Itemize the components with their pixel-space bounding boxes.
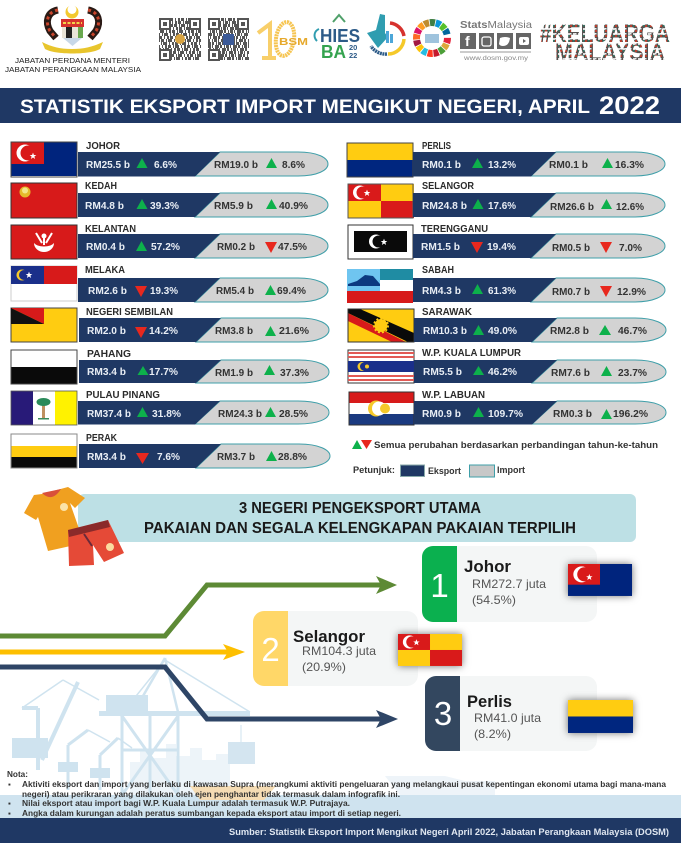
bar: export and import: RM3.7 b	[217, 451, 255, 463]
bar: export and import: RM2.6 b	[88, 285, 127, 297]
background: port illustration	[0, 658, 681, 818]
bar: export and import	[78, 278, 328, 302]
bar: export and import: RM0.7 b	[552, 286, 590, 298]
flag: Pulau Pinang	[11, 391, 77, 425]
flag: Selangor large	[398, 634, 462, 666]
bar: export and import	[79, 360, 329, 383]
bar: export and import: 69.4%	[277, 285, 307, 297]
bar: export and import	[78, 401, 329, 424]
card: rank 2 Selangor: Selangor	[293, 628, 366, 646]
logo: StatsMalaysia social: www.dosm.gov.my	[463, 55, 529, 62]
flag: Johor large	[568, 564, 632, 596]
state name: PERAK	[86, 432, 117, 444]
flag: Sarawak	[348, 309, 414, 342]
state name: W.P. KUALA LUMPUR	[422, 347, 521, 359]
notes: Nilai eksport atau import bagi W.P. Kuala Lumpur adalah termasuk W.P. Putrajaya.	[22, 799, 350, 808]
flag: Negeri Sembilan	[11, 308, 77, 342]
legend: Eksport	[428, 466, 461, 476]
logo: StatsMalaysia social: StatsMalaysia	[460, 19, 532, 31]
bar: export and import: RM0.3 b	[553, 408, 592, 420]
title banner	[0, 88, 681, 123]
flag: W.P. Labuan	[349, 392, 414, 425]
row: Sabah	[347, 264, 665, 303]
state name: KEDAH	[85, 180, 117, 192]
bar: export and import: RM24.3 b	[218, 408, 262, 420]
bar: export and import: 13.2%	[488, 159, 517, 171]
logo: Keluarga Malaysia: MALAYSIA	[555, 39, 665, 66]
notes	[7, 770, 667, 818]
logo: SDG wheel	[416, 22, 448, 54]
card: rank 1 Johor	[422, 546, 597, 622]
bar: export and import: RM0.9 b	[422, 408, 461, 420]
bar: export and import: 40.9%	[279, 200, 309, 212]
bar: export and import: RM4.3 b	[422, 285, 461, 297]
row: Johor	[11, 140, 328, 177]
bar: export and import: 21.6%	[279, 325, 310, 337]
bar: export and import	[79, 444, 330, 468]
row: Perlis	[347, 140, 665, 177]
row: Kedah	[11, 180, 328, 218]
bar: export and import: 12.9%	[617, 286, 647, 298]
bar: export and import: RM0.5 b	[552, 242, 590, 254]
flag: Kedah	[11, 183, 77, 218]
row: Perak	[11, 432, 330, 468]
bar: export and import: RM19.0 b	[214, 159, 258, 171]
bar: export and import: 23.7%	[618, 367, 648, 379]
notes: Nota:	[7, 770, 28, 779]
bar: export and import: 19.4%	[487, 241, 517, 253]
bar: export and import: 12.6%	[616, 201, 645, 213]
flag: Perlis	[347, 143, 413, 177]
state name: PERLIS	[422, 140, 451, 152]
card: rank 3 Perlis: RM41.0 juta	[474, 711, 541, 725]
arrow: navy to Perlis	[0, 667, 398, 728]
row: Sarawak	[348, 306, 666, 342]
bar: export and import: RM0.1 b	[422, 159, 461, 171]
logo: hand sign	[367, 14, 404, 54]
card: rank 2 Selangor: RM104.3 juta	[302, 644, 376, 658]
bar: export and import	[413, 193, 665, 217]
bar: export and import	[78, 152, 328, 176]
bar: export and import	[413, 234, 665, 258]
state name: SABAH	[422, 264, 454, 276]
card: rank 3 Perlis	[425, 676, 597, 751]
bar: export and import: 19.3%	[150, 285, 179, 297]
notes: negeri) atau perikraran yang dilakukan oleh ejen penghantar tidak termasuk dalam infografik ini.	[22, 790, 400, 799]
flag: W.P. Kuala Lumpur	[348, 350, 414, 383]
bar: export and import: 196.2%	[613, 408, 649, 420]
state name: NEGERI SEMBILAN	[86, 306, 173, 318]
logo: StatsMalaysia social: f	[465, 33, 470, 49]
card: rank 2 Selangor: (20.9%)	[302, 660, 346, 674]
bar: export and import: RM10.3 b	[423, 325, 467, 337]
notes: Aktiviti eksport dan import yang berlaku di kawasan Supra (merangkumi aktiviti pengeluaran yang melangkaui pusat kepentingan ekonomi utama bagi mana-mana	[22, 780, 667, 789]
state name: MELAKA	[85, 264, 125, 276]
card: rank 2 Selangor	[253, 611, 418, 686]
bar: export and import: RM4.8 b	[85, 200, 124, 212]
flag: Terengganu	[348, 225, 413, 259]
heading banner: top 3 exporting states: PAKAIAN DAN SEGALA KELENGKAPAN PAKAIAN TERPILIH	[144, 520, 576, 537]
notes: ▪	[8, 809, 11, 818]
bar: export and import: RM0.1 b	[549, 159, 588, 171]
bar: export and import: RM3.4 b	[87, 451, 126, 463]
row: Terengganu	[348, 223, 665, 259]
bar: export and import: 31.8%	[152, 408, 182, 420]
footer: source: Sumber: Statistik Eksport Import Mengikut Negeri April 2022, Jabatan Perangkaan Malaysia (DOSM)	[229, 827, 669, 838]
logo: HIES BA 2022	[315, 15, 360, 62]
agency name: JABATAN PERDANA MENTERI	[15, 56, 130, 65]
state name: PULAU PINANG	[86, 389, 160, 401]
flag: Melaka	[11, 266, 77, 301]
flag: Pahang	[11, 350, 77, 384]
bar: export and import: 17.6%	[488, 200, 517, 212]
bar: export and import: RM5.5 b	[423, 366, 462, 378]
bar: export and import: 28.5%	[279, 408, 309, 420]
bar: export and import: RM3.8 b	[215, 325, 253, 337]
bar: export and import	[413, 278, 665, 302]
row: W.P. Labuan	[349, 389, 666, 425]
bar: export and import: 49.0%	[488, 325, 518, 337]
state name: JOHOR	[86, 140, 120, 152]
row: Pahang	[11, 348, 329, 384]
bar: export and import: 14.2%	[149, 325, 179, 337]
bar: export and import: RM1.9 b	[215, 367, 253, 379]
row: Selangor	[348, 180, 665, 218]
bar: export and import: 37.3%	[280, 367, 310, 379]
bar: export and import: 7.6%	[157, 451, 181, 463]
bar: export and import: 46.7%	[618, 325, 648, 337]
bar: export and import	[413, 152, 665, 176]
bar: export and import: 109.7%	[488, 408, 524, 420]
bar: export and import	[414, 401, 666, 424]
bar: export and import: RM26.6 b	[550, 201, 594, 213]
card: rank 3 Perlis: Perlis	[467, 693, 512, 711]
bar: export and import	[78, 234, 328, 258]
arrow: green to Johor	[0, 576, 397, 636]
flag: Johor	[11, 142, 77, 177]
card: rank 1 Johor: 1	[430, 567, 449, 604]
bar: export and import: 8.6%	[282, 159, 306, 171]
legend: Petunjuk:	[353, 465, 395, 475]
row: W.P. Kuala Lumpur	[348, 347, 666, 383]
note: year-on-year change: Semua perubahan berdasarkan perbandingan tahun-ke-tahun	[374, 440, 658, 451]
footer: source	[0, 818, 681, 843]
logo: StatsMalaysia social	[460, 19, 532, 62]
state name: KELANTAN	[85, 223, 136, 235]
flag: Perlis large	[568, 700, 633, 733]
bar: export and import: RM0.2 b	[217, 241, 255, 253]
card: rank 1 Johor: RM272.7 juta	[472, 577, 546, 591]
bar: export and import: RM0.4 b	[86, 241, 125, 253]
icon: QR code 1	[159, 19, 201, 60]
bar: export and import: RM25.5 b	[86, 159, 130, 171]
logo: 10 tahun BSM	[258, 21, 308, 58]
bar: export and import: RM37.4 b	[87, 408, 131, 420]
bar: export and import: RM3.4 b	[87, 366, 126, 378]
logo: 10 tahun BSM: BSM	[279, 37, 308, 48]
flag: Kelantan	[11, 225, 77, 259]
card: rank 2 Selangor: 2	[261, 631, 280, 668]
heading banner: top 3 exporting states	[78, 494, 636, 542]
icon: QR code 2	[208, 19, 249, 60]
flag: Sabah	[347, 269, 413, 303]
icon: red shorts	[68, 520, 124, 566]
bar: export and import: 47.5%	[278, 241, 308, 253]
bar: export and import: RM1.5 b	[421, 241, 460, 253]
logo: Keluarga Malaysia	[540, 20, 670, 66]
bar: export and import: 7.0%	[619, 242, 643, 254]
logo: HIES BA 2022: BA	[321, 42, 346, 62]
state name: TERENGGANU	[421, 223, 488, 235]
notes: ▪	[8, 780, 11, 789]
bar: export and import: 46.2%	[488, 366, 518, 378]
title banner: 2022	[599, 92, 660, 120]
row: Pulau Pinang	[11, 389, 329, 425]
bar: export and import: 39.3%	[150, 200, 180, 212]
notes: Angka dalam kurungan adalah peratus sumbangan kepada eksport atau import di setiap negeri.	[22, 809, 401, 818]
state name: SARAWAK	[422, 306, 472, 318]
bar: export and import: 57.2%	[151, 241, 181, 253]
bar: export and import: RM2.8 b	[550, 325, 589, 337]
bar: export and import: RM24.8 b	[422, 200, 467, 212]
bar: export and import	[414, 318, 666, 342]
title banner: STATISTIK EKSPORT IMPORT MENGIKUT NEGERI, APRIL	[20, 97, 590, 118]
logo: HIES BA 2022: HIES	[320, 26, 360, 46]
logo: HIES BA 2022: 20	[349, 43, 357, 52]
row: Kelantan	[11, 223, 328, 259]
state name: W.P. LABUAN	[422, 389, 485, 401]
state name: PAHANG	[87, 348, 131, 360]
bar: export and import: RM7.6 b	[551, 367, 590, 379]
logo: HIES BA 2022: 22	[349, 51, 357, 60]
row: Negeri Sembilan	[11, 306, 329, 342]
bar: export and import: 16.3%	[615, 159, 645, 171]
arrow: yellow to Selangor	[0, 644, 245, 660]
card: rank 3 Perlis: (8.2%)	[474, 727, 511, 741]
flag: Perak	[11, 434, 77, 468]
card: rank 1 Johor: Johor	[464, 558, 512, 576]
row: Melaka	[11, 264, 328, 302]
bar: export and import: 61.3%	[488, 285, 517, 297]
state name: SELANGOR	[422, 180, 474, 192]
heading banner: top 3 exporting states: 3 NEGERI PENGEKSPORT UTAMA	[239, 500, 481, 517]
bar: export and import: RM2.0 b	[87, 325, 126, 337]
bar: export and import: RM5.4 b	[216, 285, 254, 297]
legend: Import	[497, 465, 525, 475]
bar: export and import: RM5.9 b	[214, 200, 253, 212]
notes: ▪	[8, 799, 11, 808]
bar: export and import	[79, 318, 329, 342]
card: rank 1 Johor: (54.5%)	[472, 593, 516, 607]
bar: export and import: 17.7%	[149, 366, 179, 378]
flag: Selangor	[348, 184, 414, 218]
bar: export and import	[414, 360, 666, 383]
agency name: JABATAN PERANGKAAN MALAYSIA	[5, 65, 141, 74]
bar: export and import: 6.6%	[154, 159, 178, 171]
agency name	[5, 56, 141, 74]
logo: Malaysian coat of arms	[42, 5, 103, 54]
legend	[353, 465, 525, 477]
bar: export and import	[78, 193, 328, 217]
card: rank 3 Perlis: 3	[434, 695, 452, 732]
icon: orange shirt	[24, 487, 85, 551]
bar: export and import: 28.8%	[278, 451, 308, 463]
